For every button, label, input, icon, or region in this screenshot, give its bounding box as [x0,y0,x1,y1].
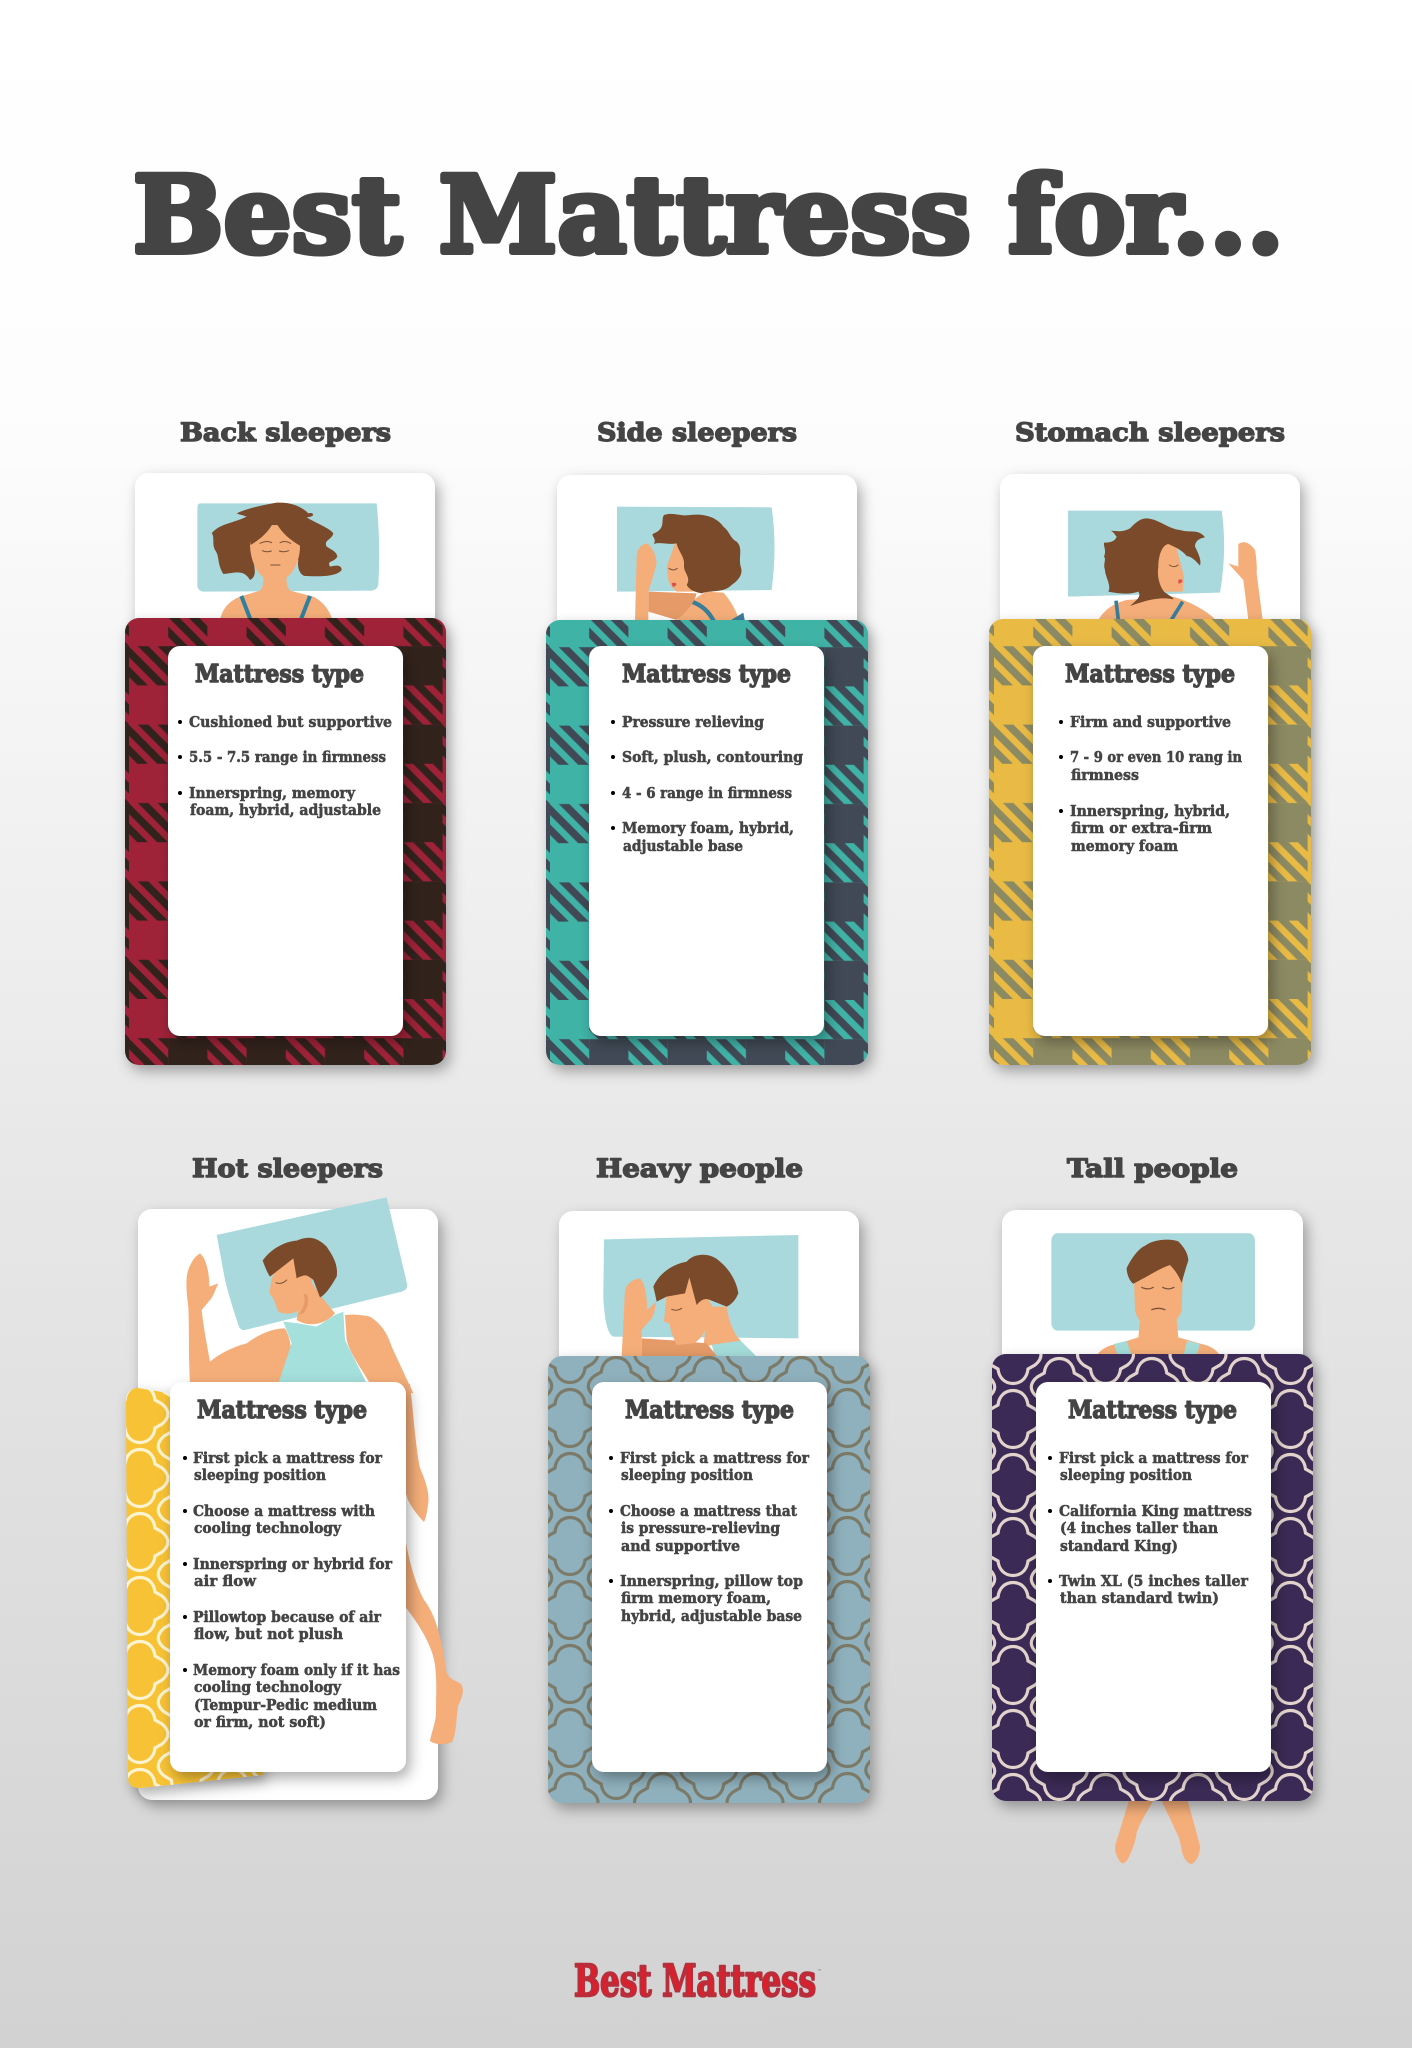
card: mattress type [1033,646,1268,1036]
card: mattress type: First pick a mattress for [1059,1450,1248,1467]
title: Best Mattress for... [133,152,1284,277]
card: mattress type: Mattress type [1065,659,1235,688]
panel: side sleepers [546,418,868,1065]
sheet [1000,474,1300,874]
panel: back sleepers [125,418,446,1065]
card: mattress type: Innerspring or hybrid for [193,1556,392,1573]
panel: stomach sleepers [989,418,1311,1065]
card: mattress type [168,646,403,1036]
heading: tall people: Tall people [1067,1154,1238,1184]
card: mattress type: First pick a mattress for [193,1450,382,1467]
blanket: teal buffalo check [546,620,868,1065]
card: mattress type: Pillowtop because of air [193,1609,381,1626]
sheet [559,1211,859,1611]
card: mattress type: adjustable base [623,838,743,855]
illustration: woman on stomach [1068,511,1263,620]
blanket: purple quatrefoil [992,1354,1313,1801]
blanket: red buffalo check [125,618,446,1065]
card: mattress type: Choose a mattress that [620,1503,797,1520]
logo: Best Mattress [574,1956,816,2007]
card: mattress type: Cushioned but supportive [189,714,392,731]
card: mattress type: Memory foam only if it has [193,1662,400,1679]
card: mattress type: Mattress type [197,1395,367,1424]
illustration: feet [1115,1797,1200,1864]
card: mattress type: firm or extra-firm [1071,820,1213,837]
illustration: heavy man on side [603,1235,798,1357]
card: mattress type: is pressure-relieving [621,1520,780,1537]
card: mattress type: Mattress type [1068,1395,1237,1424]
heading: back sleepers: Back sleepers [180,418,391,448]
card: mattress type: hybrid, adjustable base [621,1608,802,1625]
logo: ™ [817,1969,822,1975]
illustration: woman on back [197,503,379,620]
card: mattress type [589,646,824,1036]
heading: hot sleepers: Hot sleepers [192,1154,383,1184]
card: mattress type: Choose a mattress with [193,1503,375,1520]
card: mattress type: than standard twin) [1060,1590,1219,1607]
card: mattress type: Innerspring, pillow top [620,1573,803,1590]
sheet [1002,1210,1303,1610]
panel: hot sleepers [126,1154,463,1800]
illustration: tall man on back [1051,1233,1255,1355]
heading: stomach sleepers: Stomach sleepers [1015,418,1285,448]
card: mattress type: Twin XL (5 inches taller [1059,1573,1248,1590]
illustration: man sprawled, upper body [186,1197,413,1393]
card: mattress type: 7 - 9 or even 10 rang in [1070,749,1242,766]
card: mattress type [592,1382,827,1772]
card: mattress type: standard King) [1060,1538,1178,1555]
card: mattress type: sleeping position [194,1467,326,1484]
card: mattress type: Innerspring, memory [189,785,356,802]
card: mattress type: California King mattress [1059,1503,1252,1520]
card: mattress type: (Tempur-Pedic medium [194,1697,378,1714]
card: mattress type: air flow [194,1573,257,1590]
card: mattress type: foam, hybrid, adjustable [190,802,381,819]
card: mattress type: Soft, plush, contouring [622,749,803,766]
card: mattress type: memory foam [1071,838,1179,855]
card: mattress type: First pick a mattress for [620,1450,809,1467]
card: mattress type: firm memory foam, [621,1590,771,1607]
card: mattress type: Mattress type [625,1395,794,1424]
illustration: arm and leg beside the card [400,1384,463,1744]
sheet [557,475,857,875]
card: mattress type: firmness [1071,767,1139,784]
card: mattress type: Innerspring, hybrid, [1070,803,1230,820]
card: mattress type: or firm, not soft) [194,1714,326,1731]
card: mattress type: (4 inches taller than [1060,1520,1218,1537]
card: mattress type: cooling technology [194,1520,342,1537]
panel: tall people [992,1154,1313,1864]
card: mattress type: sleeping position [1060,1467,1192,1484]
card: mattress type: 4 - 6 range in firmness [622,785,792,802]
panel: heavy people [548,1154,870,1803]
blanket: yellow fold [126,1388,263,1788]
heading: side sleepers: Side sleepers [597,418,797,448]
card: mattress type: Mattress type [622,659,791,688]
card: mattress type: cooling technology [194,1679,342,1696]
card: mattress type: Mattress type [195,659,364,688]
card: mattress type: sleeping position [621,1467,753,1484]
card: mattress type [170,1382,406,1772]
card: mattress type [1036,1382,1271,1772]
heading: heavy people: Heavy people [596,1154,803,1184]
card: mattress type: Firm and supportive [1070,714,1231,731]
card: mattress type: 5.5 - 7.5 range in firmness [189,749,386,766]
blanket: blue quatrefoil [548,1356,870,1803]
blanket: yellow buffalo check [989,619,1311,1065]
card: mattress type: Pressure relieving [622,714,764,731]
illustration: woman on side [617,507,774,622]
sheet [138,1209,438,1800]
card: mattress type: flow, but not plush [194,1626,343,1643]
sheet [135,473,435,873]
card: mattress type: Memory foam, hybrid, [622,820,794,837]
card: mattress type: and supportive [621,1538,740,1555]
